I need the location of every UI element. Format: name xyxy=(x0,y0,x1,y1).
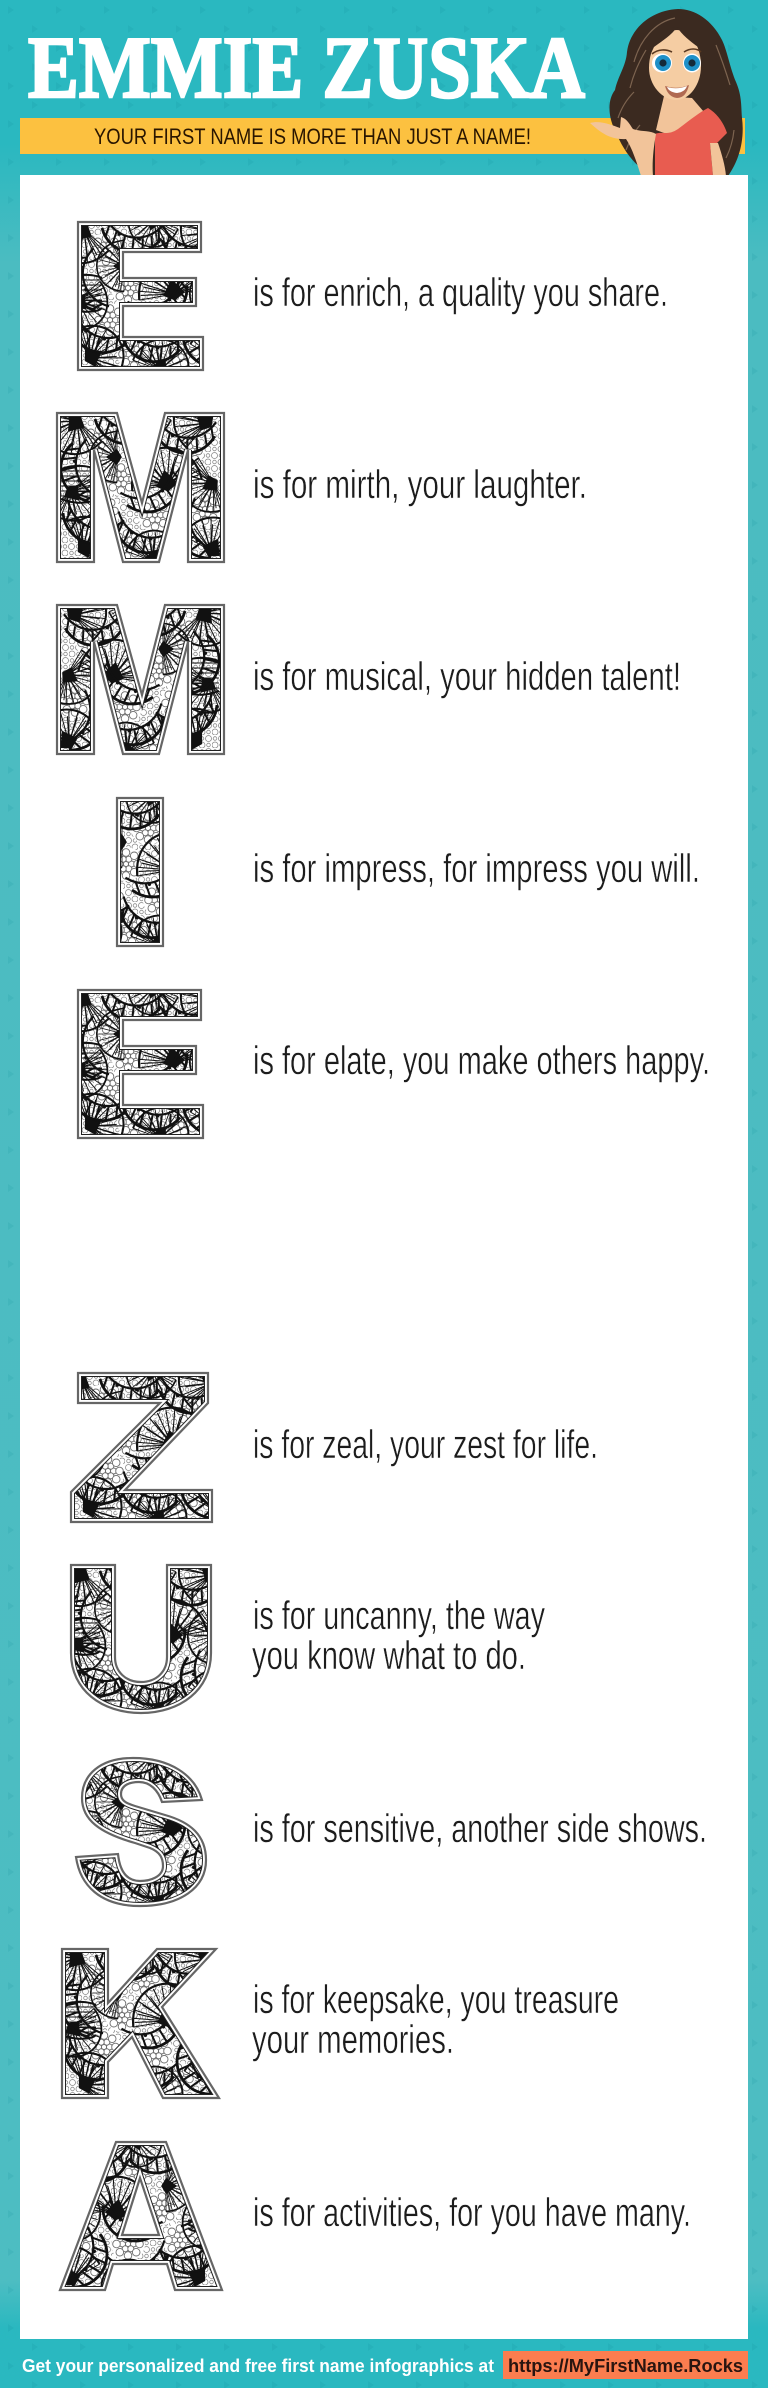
text: uncanny: you know what to do. xyxy=(252,1634,526,1678)
row: E elate xyxy=(76,988,708,1140)
text: uncanny: is for uncanny, the way xyxy=(253,1594,545,1638)
footer url badge xyxy=(503,2351,748,2379)
row: Z zeal xyxy=(70,1372,596,1524)
row: I impress xyxy=(116,796,698,948)
letter A xyxy=(58,2140,224,2292)
text: keepsake: your memories. xyxy=(252,2018,454,2062)
text: zeal: is for zeal, your zest for life. xyxy=(253,1423,598,1467)
row: M musical xyxy=(56,604,678,756)
letter E xyxy=(76,988,204,1140)
subtitle banner xyxy=(20,118,745,154)
row: U uncanny xyxy=(70,1564,545,1714)
letter Z xyxy=(70,1372,214,1524)
letter I xyxy=(116,796,164,948)
letter E xyxy=(76,220,204,372)
letter S xyxy=(74,1756,208,1908)
text: keepsake: is for keepsake, you treasure xyxy=(253,1978,619,2022)
icon: cartoon woman mascot xyxy=(590,9,743,176)
subtitle banner: YOUR FIRST NAME IS MORE THAN JUST A NAME! xyxy=(94,124,531,149)
text: mirth: is for mirth, your laughter. xyxy=(253,463,587,507)
row: K keepsake xyxy=(60,1948,618,2100)
title: EMMIE ZUSKA xyxy=(28,20,585,117)
footer text: Get your personalized and free first name infographics at xyxy=(22,2356,494,2376)
letter M xyxy=(56,412,226,564)
footer xyxy=(22,2351,748,2379)
footer url badge: https://MyFirstName.Rocks xyxy=(508,2356,743,2376)
row: E enrich xyxy=(76,220,666,372)
letter K xyxy=(60,1948,221,2100)
row: A activities xyxy=(58,2140,688,2292)
row: S sensitive xyxy=(74,1756,704,1908)
text: uncanny xyxy=(252,1594,545,1678)
letter M xyxy=(56,604,226,756)
row: M mirth xyxy=(56,412,584,564)
text: keepsake xyxy=(252,1978,619,2062)
letter U xyxy=(70,1564,212,1714)
